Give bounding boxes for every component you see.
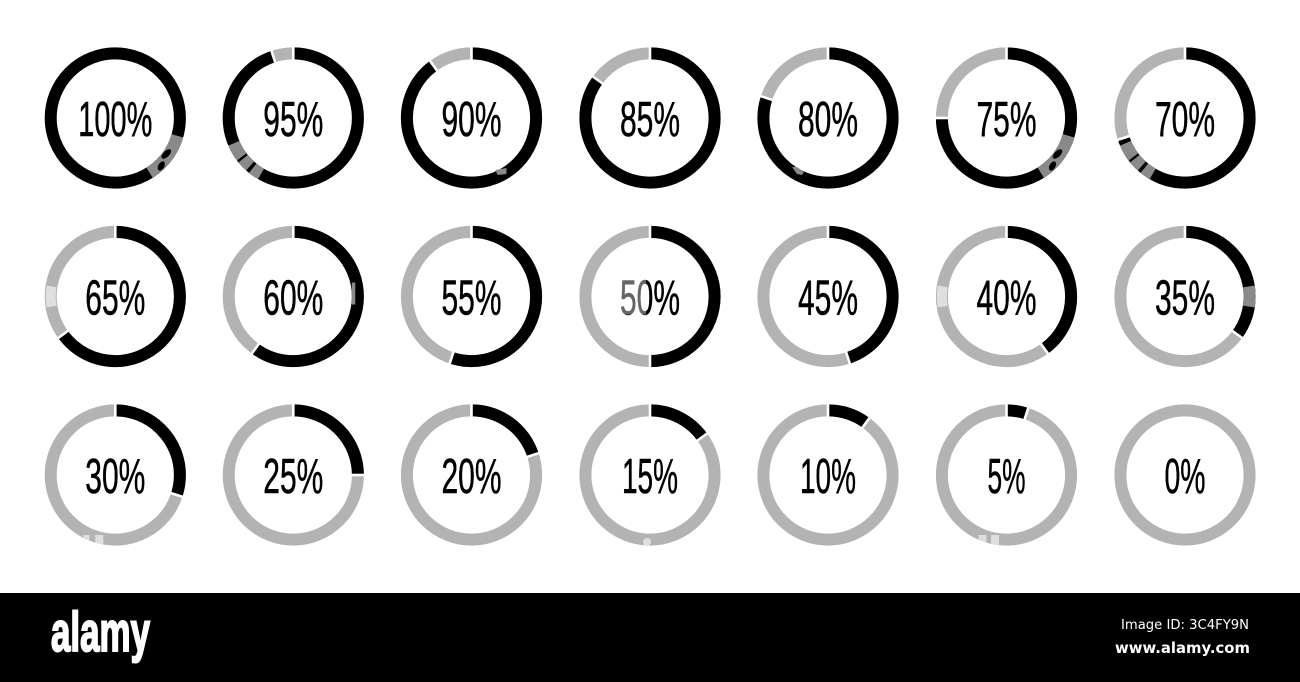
donut: 55%: 55% [442,272,502,326]
donut: 35%: 35% [1155,272,1215,326]
donut: 0%: 0% [1165,450,1205,504]
donut: 25% [229,403,365,540]
donut: 40%: 40% [976,272,1036,326]
donut: 95% [202,27,385,209]
donut: 70% [1094,27,1276,209]
donut: 85% [585,46,715,183]
donut: 100% [35,38,195,198]
donut: 100%: 100% [78,93,152,147]
donut: 50%: 50% [620,272,680,326]
donut: 35% [1111,223,1259,370]
donut: 25%: 25% [263,450,323,504]
donut: 30% [51,403,184,546]
donut: 80% [760,46,893,183]
donut: 10%: 10% [800,450,856,504]
donut: 5% [942,403,1071,546]
donut: 10% [763,403,893,540]
donut: 55% [407,224,536,365]
donut: 15% [585,403,715,546]
donut: 85%: 85% [620,93,680,147]
donut: 45% [763,224,893,365]
website: www.alamy.com [1115,639,1250,657]
footer band [0,593,1300,682]
donut: 80%: 80% [798,93,858,147]
donut: 40% [933,223,1080,370]
donut: 75% [927,38,1086,198]
donut: 20%: 20% [442,450,502,504]
donut: 30%: 30% [85,450,145,504]
donut: 20% [407,403,540,540]
donut: 75%: 75% [976,93,1036,147]
donut: 50% [585,224,715,368]
donut: 60%: 60% [263,272,323,326]
logo: alamy: alamy [51,600,150,663]
donut: 5%: 5% [988,450,1026,504]
donut: 70%: 70% [1155,93,1215,147]
donut: 0% [1120,410,1250,540]
image id: Image ID: 3C4FY9N [1121,617,1249,633]
donut: 90%: 90% [442,93,502,147]
donut: 45%: 45% [798,272,858,326]
donut: 90% [407,46,536,183]
donut: 65% [41,223,189,370]
donut: 60% [229,224,358,361]
donut: 15%: 15% [622,450,678,504]
donut: 65%: 65% [85,272,145,326]
donut: 95%: 95% [263,93,323,147]
